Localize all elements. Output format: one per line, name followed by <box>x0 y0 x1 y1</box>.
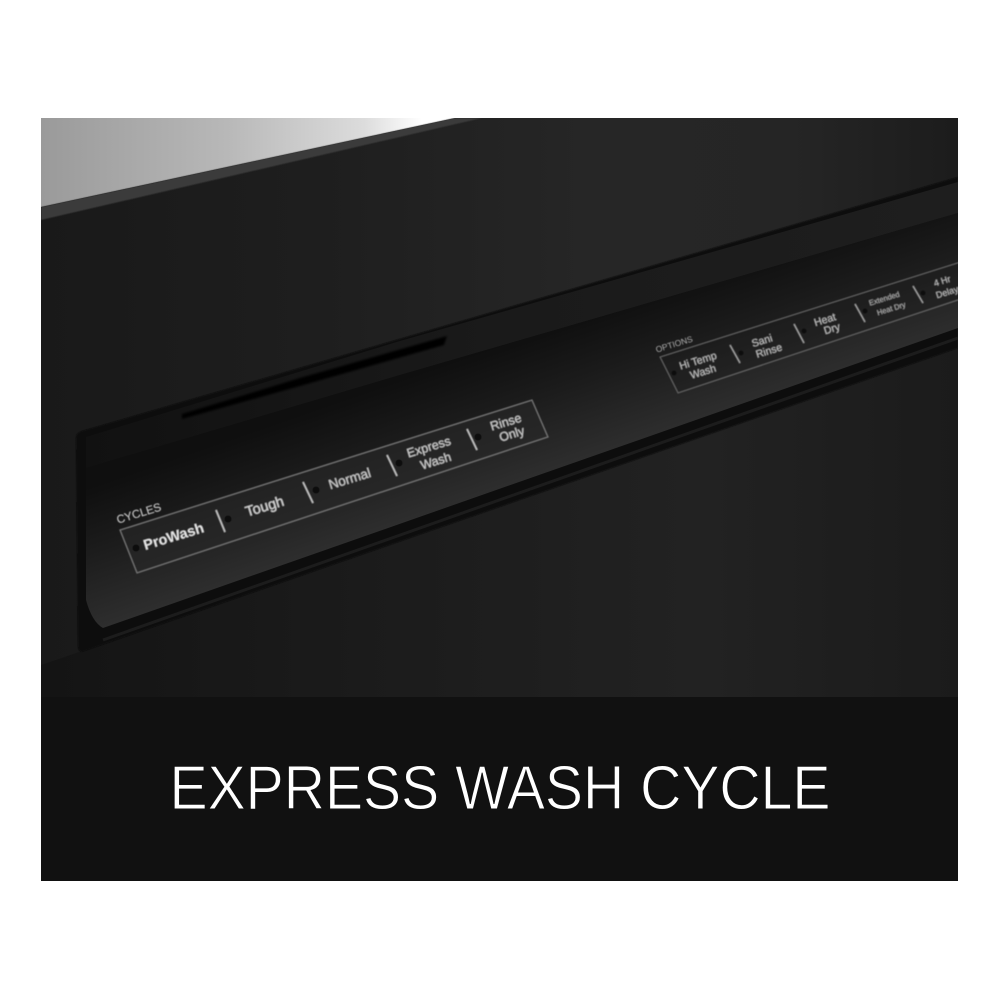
cycle: Express Wash <box>406 438 452 470</box>
option: Hi Temp Wash: Hi Temp <box>678 350 718 372</box>
control panel <box>76 177 970 651</box>
option: Heat Dry: Heat <box>813 311 838 329</box>
cycle separators <box>216 429 477 532</box>
cycle: Rinse Only: Rinse <box>488 411 523 434</box>
option: Hi Temp Wash <box>678 352 718 380</box>
dishwasher door body <box>41 118 958 698</box>
panel face <box>86 213 958 628</box>
option: Extended Heat Dry: Heat Dry <box>876 300 907 317</box>
handle slot <box>182 336 447 419</box>
options heading: OPTIONS <box>654 334 694 355</box>
option: 4 Hr Delay: 4 Hr <box>933 274 952 288</box>
caption: EXPRESS WASH CYCLE <box>170 754 830 823</box>
option: Hi Temp Wash: Wash <box>689 362 718 382</box>
cycles box <box>120 400 548 573</box>
cycle: Tough: Tough <box>244 494 286 521</box>
option: Heat Dry: Dry <box>823 321 842 337</box>
top edge trim <box>41 118 482 220</box>
option: Extended Heat Dry: Extended <box>868 290 901 308</box>
product photo: dishwasher control panel <box>41 118 970 881</box>
cycle: Rinse Only: Only <box>497 424 527 445</box>
options box <box>660 259 970 393</box>
stainless steel top <box>41 118 455 207</box>
options group <box>654 259 970 393</box>
lower door front <box>41 348 958 698</box>
recessed upper band <box>272 182 958 412</box>
cycles group <box>115 400 548 573</box>
cycles heading: CYCLES <box>115 502 163 527</box>
cycle: Normal: Normal <box>327 465 373 492</box>
option: Sani Rinse: Rinse <box>755 341 784 361</box>
option: Sani Rinse: Sani <box>750 332 774 350</box>
cycle: ProWash: ProWash <box>142 520 206 554</box>
option: Extended Heat Dry <box>868 290 906 316</box>
option: Sani Rinse <box>751 333 783 358</box>
option: Heat Dry <box>813 312 840 335</box>
cycle: Express Wash: Wash <box>419 450 453 472</box>
option indicator lights <box>672 290 926 376</box>
lower trim groove highlight <box>103 338 958 640</box>
cycle: Rinse Only <box>489 414 524 442</box>
caption bar <box>41 697 958 881</box>
cycle indicator lights <box>132 434 482 552</box>
panel bezel <box>76 177 958 651</box>
option: 4 Hr Delay: Delay <box>935 284 960 300</box>
option: 4 Hr Delay <box>934 276 958 299</box>
cycle: Express Wash: Express <box>405 434 452 460</box>
option separators <box>730 286 923 363</box>
